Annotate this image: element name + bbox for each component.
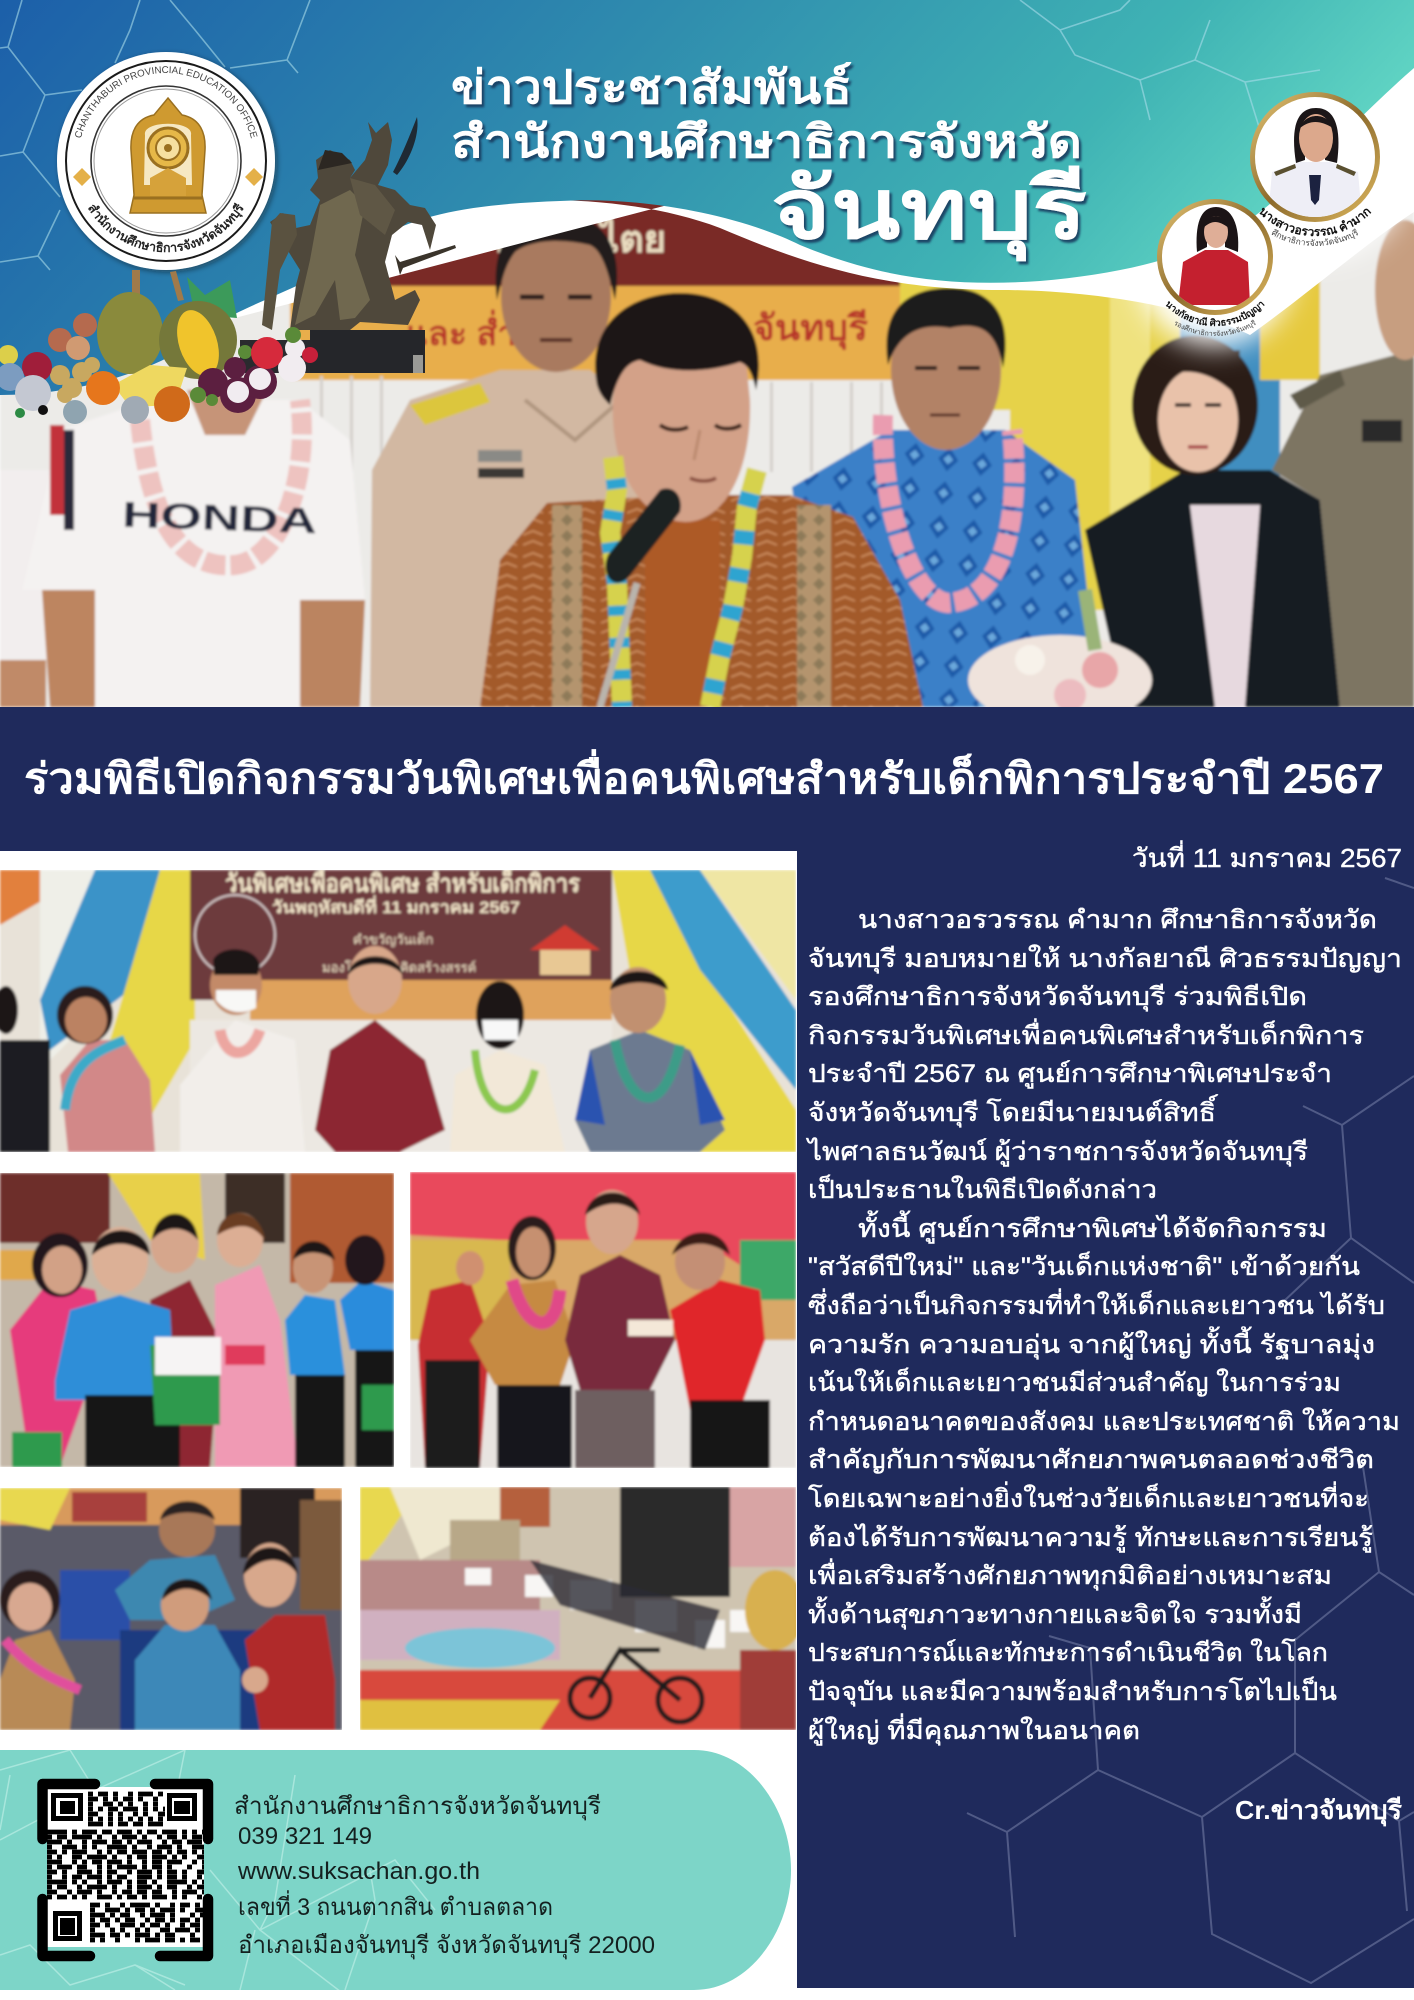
photo 5: donated bicycles and gifts [360, 1487, 805, 1730]
article body text: กิจกรรมวันพิเศษเพื่อคนพิเศษสำหรับเด็กพิการ [808, 1018, 1364, 1050]
contact pill [0, 1750, 791, 1995]
person in Honda shirt: HONDA [121, 494, 318, 541]
portrait: provincial education officer [1250, 92, 1380, 246]
gold emblem [130, 98, 206, 213]
article body text: กำหนดอนาคตของสังคม และประเทศชาติ ให้ความ [808, 1407, 1400, 1436]
article body text: ทั้งด้านสุขภาวะทางกายและจิตใจ รวมทั้งมี [808, 1596, 1302, 1630]
contact details: สำนักงานศึกษาธิการจังหวัดจันทบุรี [234, 1793, 601, 1821]
ring text bottom: สำนักงานศึกษาธิการจังหวัดจันทบุรี [88, 202, 244, 252]
photo 1: group in front of stage banner [0, 866, 796, 1152]
header gradient with hexagon pattern [0, 0, 1414, 395]
photo 1: group in front of stage banner: วันพิเศษเพื่อคนพิเศษ สำหรับเด็กพิการ [225, 866, 581, 898]
title line 3: จันทบุรี [771, 162, 1087, 262]
article date: วันที่ 11 มกราคม 2567 [1132, 840, 1402, 873]
banner backdrop [290, 190, 1320, 610]
police officer at right [1272, 220, 1414, 707]
article body text: เป็นประธานในพิธีเปิดดังกล่าว [808, 1174, 1157, 1204]
article body text: ทั้งนี้ ศูนย์การศึกษาพิเศษได้จัดกิจกรรม [858, 1210, 1327, 1244]
article body text: นางสาวอรวรรณ คำมาก ศึกษาธิการจังหวัด [858, 906, 1377, 934]
credit line: Cr.ข่าวจันทบุรี [1235, 1795, 1402, 1827]
header title [451, 61, 1087, 262]
man in khaki uniform [370, 214, 640, 707]
white ribbon and glow under wave [227, 40, 1414, 346]
photo 4: boy in wheelchair with family [0, 1488, 342, 1730]
flower bouquet [968, 590, 1152, 725]
article body text: จันทบุรี มอบหมายให้ นางกัลยาณี ศิวธรรมปัญญา [808, 944, 1402, 974]
hero photo: dignitaries at the microphone [0, 180, 1414, 725]
banner backdrop: และ ส่ำ [406, 309, 516, 353]
contact details: 039 321 149 [238, 1823, 372, 1850]
monument statue [240, 117, 456, 373]
person in Honda shirt [22, 390, 365, 707]
title line 1: ข่าวประชาสัมพันธ์ [451, 61, 852, 113]
article body text: จังหวัดจันทบุรี โดยมีนายมนต์สิทธิ์ [808, 1094, 1219, 1128]
photo 1: group in front of stage banner: วันพฤหัสบดีที่ 11 มกราคม 2567 [272, 895, 520, 917]
label: deputy role: รองศึกษาธิการจังหวัดจันทบุรี [1175, 320, 1256, 336]
article panel navy [797, 840, 1414, 1988]
QR code [42, 1784, 208, 1956]
photo 3: booth under red canopy [410, 1172, 796, 1468]
photo 1: group in front of stage banner: คำขวัญวันเด็ก [353, 930, 433, 947]
fruit and gemstones cluster [0, 270, 318, 424]
article body text [806, 906, 1402, 1746]
article body text: "สวัสดีปีใหม่" และ"วันเด็กแห่งชาติ" เข้าด้วยกัน [808, 1251, 1360, 1281]
logo badge: Chanthaburi Provincial Education Office [56, 50, 280, 276]
contact details: อำเภอเมืองจันทบุรี จังหวัดจันทบุรี 22000 [238, 1932, 655, 1960]
article body text: เพื่อเสริมสร้างศักยภาพทุกมิติอย่างเหมาะสม [808, 1558, 1332, 1591]
title band navy [0, 707, 1414, 851]
contact details: เลขที่ 3 ถนนตากสิน ตำบลตลาด [238, 1890, 553, 1921]
photo 1: group in front of stage banner: มองโลกกว้าง คิดสร้างสรรค์ [322, 960, 476, 975]
banner backdrop: งประชา [404, 219, 535, 261]
ring text top: CHANTHABURI PROVINCIAL EDUCATION OFFICE [75, 66, 258, 138]
article body text: เน้นให้เด็กและเยาวชนมีส่วนสำคัญ ในการร่วม [808, 1367, 1341, 1397]
article body text: ปัจจุบัน และมีความพร้อมสำหรับการโตไปเป็น [808, 1676, 1337, 1707]
portrait: deputy education officer [1157, 199, 1273, 336]
article body text: ความรัก ความอบอุ่น จากผู้ใหญ่ ทั้งนี้ รัฐบาลมุ่ง [808, 1326, 1375, 1360]
title line 2: สำนักงานศึกษาธิการจังหวัด [451, 116, 1082, 167]
label: education officer role: ศึกษาธิการจังหวัดจันทบุรี [1272, 228, 1358, 246]
article body text: ผู้ใหญ่ ที่มีคุณภาพในอนาคต [808, 1713, 1140, 1746]
main headline: ร่วมพิธีเปิดกิจกรรมวันพิเศษเพื่อคนพิเศษสำหรับเด็กพิการประจำปี 2567 [24, 749, 1384, 802]
central speaker in orange silk [480, 293, 923, 707]
man in blue shirt with garland [792, 288, 1100, 707]
article body text: โดยเฉพาะอย่างยิ่งในช่วงวัยเด็กและเยาวชนที่จะ [808, 1481, 1369, 1513]
contact details [234, 1793, 655, 1960]
woman in black suit [1085, 335, 1340, 707]
article body text: ไพศาลธนวัฒน์ ผู้ว่าราชการจังหวัดจันทบุรี [806, 1137, 1308, 1167]
label: education officer name: นางสาวอรวรรณ คำมาก [1260, 208, 1372, 236]
article body text: ประจำปี 2567 ณ ศูนย์การศึกษาพิเศษประจำ [808, 1060, 1332, 1089]
white pleated curtain [318, 374, 884, 472]
article body text: รองศึกษาธิการจังหวัดจันทบุรี ร่วมพิธีเปิด [808, 983, 1307, 1012]
banner backdrop: ไตย [596, 217, 666, 261]
banner backdrop: จันทบุรี [753, 307, 869, 351]
photo 2: children with gift bags [0, 1173, 394, 1467]
article body text: ซึ่งถือว่าเป็นกิจกรรมที่ทำให้เด็กและเยาวชน ได้รับ [808, 1288, 1385, 1320]
article body text: สำคัญกับการพัฒนาศักยภาพคนตลอดช่วงชีวิต [808, 1446, 1374, 1474]
contact details: www.suksachan.go.th [237, 1858, 480, 1885]
person left edge [0, 658, 48, 707]
label: deputy name: นางกัลยาณี ศิวธรรมปัญญา [1166, 301, 1265, 326]
article body text: ประสบการณ์และทักษะการดำเนินชีวิต ในโลก [808, 1638, 1328, 1667]
article body text: ต้องได้รับการพัฒนาความรู้ ทักษะและการเรียนรู้ [808, 1523, 1373, 1553]
